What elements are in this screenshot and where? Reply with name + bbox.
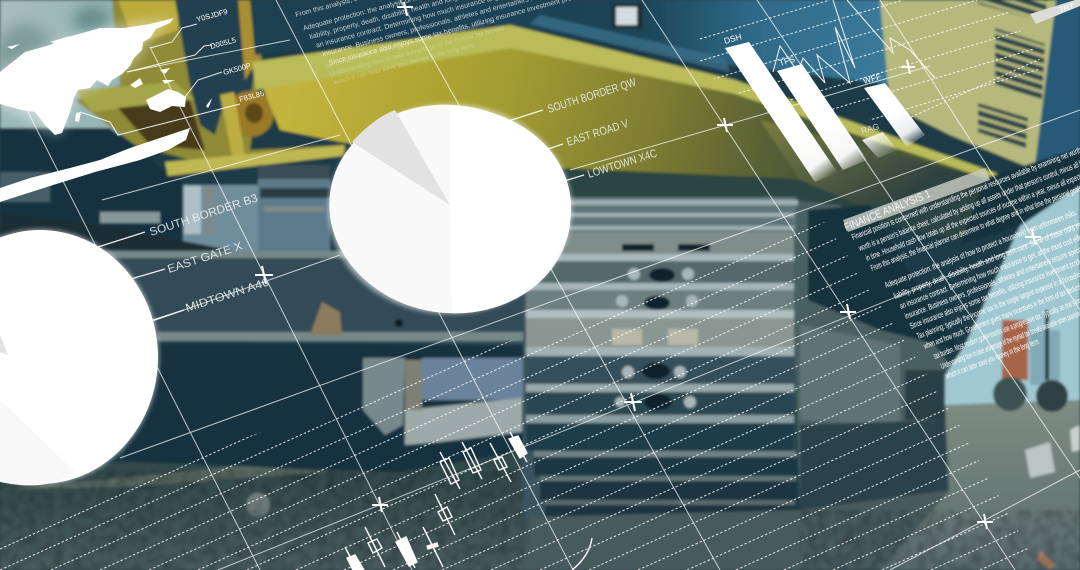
map: Eurasia and Africa [0, 18, 174, 135]
location labels [98, 77, 659, 320]
text on body: faint paragraph: Understanding how to take advantage of the myriad tax breaks [329, 24, 506, 78]
photo: sky and trees top-left [0, 0, 135, 135]
paragraph 2 [883, 207, 1080, 381]
bar DSH [723, 31, 838, 182]
photo: yellow body underside [252, 25, 1015, 200]
label: South Border B3: SOUTH BORDER B3 [148, 193, 259, 239]
bar RAG: RAG [860, 121, 880, 136]
photo: yellow pin joint [220, 0, 274, 156]
label: Lowtown X4C: LOWTOWN X4C [586, 148, 659, 181]
photo: distant blue yard right [945, 186, 1080, 405]
text on body: faint paragraph: which it can later save you money in the long term. [332, 42, 476, 87]
label: East Gate X: EAST GATE X [166, 240, 244, 276]
photo: olive shadow lower right of body [760, 120, 1012, 205]
label: Midtown A46 [153, 277, 271, 320]
photo: orange machine and tyre right [993, 310, 1068, 412]
map leader lines and codes: Y0SJDF9 [195, 7, 229, 24]
pie chart: left [0, 229, 159, 485]
text on body: faint paragraph: tax burden. Most modern governments use a progressive tax. [325, 17, 498, 70]
candle 3 [396, 532, 417, 568]
photo: engine panel louvres [978, 0, 1047, 148]
left pie slices [0, 335, 8, 355]
photo: pillar and light debris [363, 358, 525, 445]
financial analysis panel [843, 141, 1080, 381]
photo: pale columns behind the arm [0, 172, 261, 251]
candle 2 [365, 527, 385, 567]
world map [0, 18, 212, 202]
bar TFS: TFS [778, 54, 796, 68]
bar chart: fading bars [723, 31, 925, 182]
line chart: zigzag [773, 0, 935, 83]
map: lower streak continent [0, 128, 190, 202]
label: Midtown A46: MIDTOWN A46 [184, 277, 271, 315]
map: Madagascar [75, 112, 81, 122]
photo: dark band under the body [340, 145, 1005, 240]
map: Australia [146, 89, 186, 112]
curve fragment bottom [572, 538, 592, 570]
map leader lines and codes: GK500P [222, 61, 252, 77]
candle 7 [462, 442, 482, 479]
corner tag: top right: TRT [1058, 2, 1075, 15]
map leader lines and codes [80, 7, 265, 135]
candle 6 [440, 452, 460, 489]
photo: ground left [0, 450, 530, 570]
plus markers [255, 2, 1041, 529]
photo: right ground grain [800, 510, 1080, 570]
photo: body top rim [252, 25, 1015, 188]
photo: ground right [880, 395, 1080, 570]
candlestick chart [345, 432, 527, 570]
photo: blue operator cab [250, 0, 925, 85]
photo: crawler track plates [523, 197, 798, 519]
photo: ground grain texture [0, 470, 525, 570]
photo: dark band right edge [960, 148, 1080, 245]
map leader lines and codes: D005L5 [209, 35, 237, 51]
candle 4 [423, 527, 443, 567]
map: New Zealand [206, 98, 212, 108]
pie slice [352, 110, 450, 205]
photo: right yellow engine panel [880, 0, 1062, 172]
corner tag: top right [1030, 0, 1080, 24]
photo: yellow boom arm [75, 0, 345, 176]
photo: track shoe left [0, 212, 250, 256]
label: South Border B3 [98, 193, 259, 247]
pie disc [316, 89, 584, 329]
bar WFF: WFF [862, 71, 882, 86]
label: South Border QW: SOUTH BORDER QW [546, 77, 638, 116]
photo: hydraulic hoses [175, 0, 256, 135]
photo: dark cavity beneath beam [125, 345, 525, 475]
bar DSH: DSH [723, 31, 743, 46]
photo: dark yard band left [0, 128, 260, 260]
candle 8 [490, 443, 511, 482]
label: South Border QW [505, 77, 638, 122]
candle 1 [345, 547, 364, 570]
pie glow [328, 104, 572, 314]
left pie glow [0, 229, 159, 485]
left pie disc [0, 230, 158, 484]
candle 5 [435, 494, 455, 535]
photo: track side right dark section [790, 200, 960, 510]
bar RAG [860, 121, 898, 158]
label: East Gate X [131, 240, 244, 279]
map: glow [0, 18, 175, 135]
bar TFS [777, 54, 867, 170]
map leader lines and codes: F83L85 [238, 89, 265, 104]
label: East Road V [527, 118, 630, 156]
pie lighter half [450, 106, 571, 313]
pie chart: centre [316, 89, 584, 329]
photo: ground under track [530, 490, 950, 570]
panel heading: FINANCE ANALYSIS 1 [843, 188, 932, 234]
photo: debris right [0, 425, 1080, 570]
photo: cab window [530, 4, 730, 72]
photo: sprocket gear [258, 165, 330, 255]
label: East Road V: EAST ROAD V [565, 118, 630, 149]
candle 9 [509, 432, 527, 462]
map: Greenland fragment [7, 36, 70, 49]
photo: main steel beam [100, 250, 530, 345]
map: Indonesia islands [130, 68, 175, 88]
panel heading band [843, 168, 990, 232]
bar WFF [862, 71, 925, 147]
photo: far right blue panel [1035, 0, 1080, 165]
label: Lowtown X4C [548, 148, 659, 186]
